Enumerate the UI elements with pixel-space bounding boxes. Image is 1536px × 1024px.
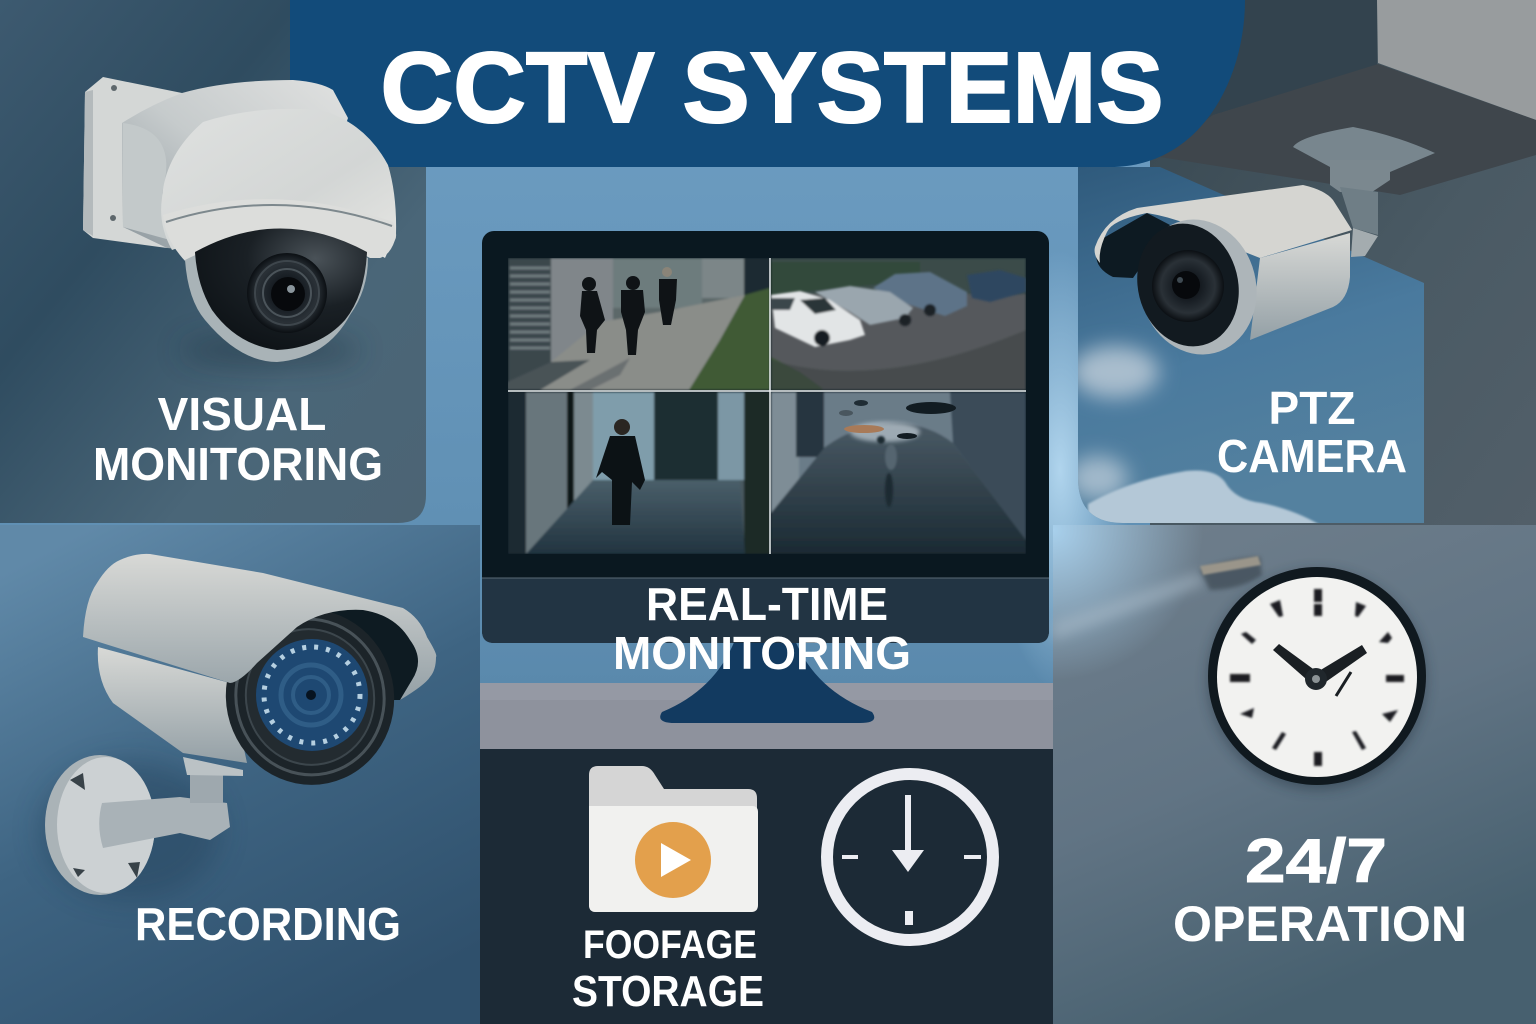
heading: 24/7: 24/7 xyxy=(1245,827,1387,896)
heading: visual: VISUAL xyxy=(158,388,326,440)
icon: video folder xyxy=(589,766,758,912)
divider lines xyxy=(508,258,1026,554)
heading: PTZ: PTZ xyxy=(1269,382,1355,434)
panel: visual monitoring xyxy=(83,77,396,490)
title banner xyxy=(290,0,1245,167)
heading: monitoring label: MONITORING xyxy=(93,438,383,490)
panel: real-time monitor xyxy=(482,231,1049,679)
icon: dome camera xyxy=(83,77,396,366)
panel: PTZ camera background xyxy=(1068,0,1536,525)
icon: wall clock xyxy=(1207,567,1427,790)
heading: operation: OPERATION xyxy=(1173,896,1467,952)
heading: storage: STORAGE xyxy=(572,967,764,1016)
heading: recording: RECORDING xyxy=(135,898,401,950)
heading: real-time: REAL-TIME xyxy=(646,578,888,630)
feed: top left xyxy=(507,258,770,390)
panel: PTZ camera xyxy=(1095,127,1435,482)
title: CCTV SYSTEMS xyxy=(380,32,1164,144)
panel: recording xyxy=(0,525,480,1024)
heading: footage: FOOFAGE xyxy=(583,923,757,967)
panel: footage storage xyxy=(480,749,1053,1024)
panel: visual monitoring background xyxy=(0,0,426,523)
icon: clock outline xyxy=(827,774,993,940)
heading: monitoring: MONITORING xyxy=(613,627,911,679)
feed: bottom left xyxy=(508,392,770,554)
heading: camera: CAMERA xyxy=(1217,430,1407,482)
panel: monitor stand and desk xyxy=(480,640,1053,749)
panel: 24/7 operation xyxy=(1053,525,1536,1024)
panel: right glow xyxy=(990,250,1130,690)
icon: PTZ bullet camera xyxy=(1095,127,1435,367)
feed: bottom right xyxy=(771,392,1026,554)
icon: bullet camera with IR ring xyxy=(40,554,436,900)
feed: top right xyxy=(771,258,1026,390)
